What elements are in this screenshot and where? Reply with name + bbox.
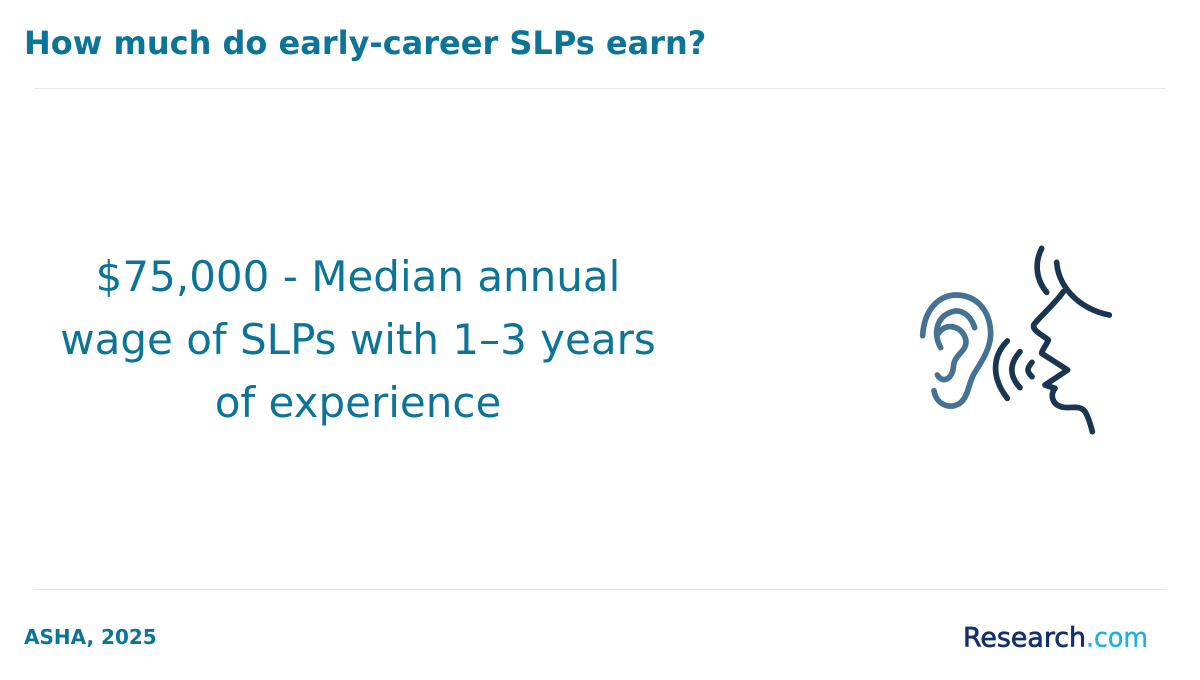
icon: speaking face and sound waves xyxy=(996,248,1109,432)
icon: ear and speaking face xyxy=(920,246,1112,434)
source: ASHA, 2025 xyxy=(24,625,157,649)
main statistic text xyxy=(60,252,656,427)
logo: Research.com: .com xyxy=(1086,622,1148,654)
main statistic text: $75,000 - Median annual xyxy=(96,252,620,301)
main statistic text: wage of SLPs with 1–3 years xyxy=(60,315,656,364)
logo: Research.com: Research xyxy=(963,622,1086,654)
title: How much do early-career SLPs earn? xyxy=(24,24,706,62)
main statistic text: of experience xyxy=(215,378,501,427)
icon: ear xyxy=(923,295,991,406)
logo: Research.com xyxy=(963,622,1148,654)
